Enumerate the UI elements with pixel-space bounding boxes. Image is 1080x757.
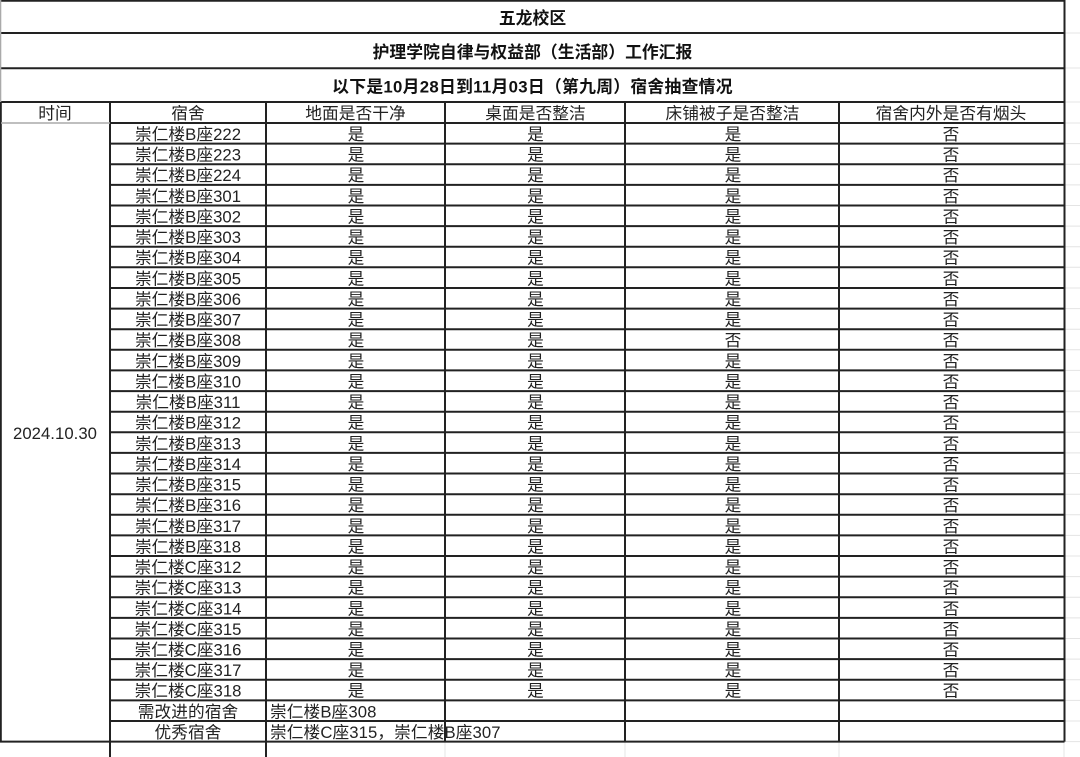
row: B301: 是 [725,187,742,206]
row: C312: 是 [348,558,365,577]
row: B316: 是 [348,496,365,515]
row: C315: 是 [725,620,742,639]
row: B223: 是 [348,146,365,165]
row: B224: 是 [348,166,365,185]
row: C314 [134,599,959,618]
row: B306: 是 [348,290,365,309]
row: B317: 崇仁楼B座317 [135,517,241,536]
row: B313 [135,434,959,453]
row: B316 [135,496,959,515]
row: C313: 是 [725,579,742,598]
row: B301: 崇仁楼B座301 [135,187,241,206]
row: C316: 崇仁楼C座316 [134,640,242,660]
row: B311: 是 [527,393,544,412]
row: B305: 是 [527,269,544,288]
row: B309: 否 [943,352,959,371]
row: B306: 是 [725,290,742,309]
row: B303: 是 [725,228,742,247]
row: B303: 崇仁楼B座303 [135,228,241,247]
row: B316: 否 [943,496,959,515]
row: B307: 是 [348,311,365,330]
row: B315: 否 [943,476,959,494]
heading: department report: 护理学院自律与权益部（生活部）工作汇报 [373,42,693,62]
row: B318: 是 [348,537,365,556]
row: C314: 否 [943,599,959,618]
row: B224: 是 [527,166,544,185]
row: B311: 是 [725,393,742,412]
row: C316: 是 [725,640,742,660]
row: B318: 是 [527,537,544,556]
row: C318: 是 [725,682,742,701]
row: B223: 否 [943,146,959,165]
row: C314: 崇仁楼C座314 [134,599,242,618]
row: B302: 是 [725,208,742,226]
row: B318: 是 [725,537,742,556]
row: B314: 是 [348,455,365,474]
row: C317: 是 [725,661,742,680]
table header row [38,104,1026,123]
row: B312 [135,414,959,433]
row: dorms needing improvement: 需改进的宿舍 [138,702,238,721]
row: dorms needing improvement [138,702,376,721]
row: B302 [135,208,959,226]
row: B313: 是 [527,434,544,453]
row: B306: 是 [527,290,544,309]
row: C313: 是 [348,579,365,598]
row: dorms needing improvement: 崇仁楼B座308 [270,702,376,721]
row: B317: 否 [943,517,959,536]
row: B306: 否 [943,290,959,309]
row: B224: 否 [943,166,959,185]
row: B311: 否 [943,393,959,412]
row: C315 [134,620,959,639]
row: B301: 否 [943,187,959,206]
table header row: 桌面是否整洁 [485,104,586,123]
row: B303: 是 [527,228,544,247]
row: B314: 崇仁楼B座314 [135,455,241,474]
row: B313: 是 [348,434,365,453]
row: B308: 崇仁楼B座308 [135,331,241,350]
row: B309 [135,352,959,371]
row: B315: 是 [348,476,365,494]
row: B315: 是 [725,476,742,494]
row: B222: 是 [527,125,544,144]
row: B302: 崇仁楼B座302 [135,208,241,226]
row: C312: 是 [527,558,544,577]
row: B307: 是 [725,311,742,330]
heading: inspection week: 以下是10月28日到11月03日（第九周）宿舍抽查情况 [332,76,733,96]
row: B317: 是 [348,517,365,536]
row: B310: 是 [348,372,365,391]
row: B307: 是 [527,311,544,330]
row: B315: 崇仁楼B座315 [135,476,241,494]
row: B310 [135,372,959,391]
row: B312: 是 [527,414,544,433]
table header row: 床铺被子是否整洁 [666,104,799,123]
table header row: 地面是否干净 [305,104,406,123]
row: C318 [134,682,959,701]
row: C318: 崇仁楼C座318 [134,682,242,701]
row: B307: 否 [943,311,959,330]
row: C313: 是 [527,579,544,598]
row: B314 [135,455,959,474]
row: B222 [135,125,959,144]
row: B311: 是 [348,393,365,412]
row: B224: 崇仁楼B座224 [135,166,241,185]
row: C315: 是 [348,620,365,639]
row: B309: 是 [527,352,544,371]
row: B223: 崇仁楼B座223 [135,146,241,165]
row: B311 [136,393,959,412]
row: C312: 是 [725,558,742,577]
row: B315 [135,476,959,494]
row: B315: 是 [527,476,544,494]
row: B304: 是 [348,249,365,268]
row: B305 [135,269,959,288]
row: C316: 是 [527,640,544,660]
row: B305: 是 [348,269,365,288]
row: C312 [134,558,959,577]
row: B310: 是 [725,372,742,391]
row: B314: 是 [725,455,742,474]
row: B314: 否 [943,455,959,474]
row: B224: 是 [725,166,742,185]
row: C314: 是 [348,599,365,618]
row: C317: 崇仁楼C座317 [134,661,242,680]
row: B222: 是 [725,125,742,144]
row: B224 [135,166,959,185]
title: campus name: 五龙校区 [499,8,566,28]
table header row: 宿舍 [171,104,205,123]
row: B312: 崇仁楼B座312 [135,414,241,433]
row: C317: 否 [943,661,959,680]
row: B223: 是 [725,146,742,165]
row: B312: 是 [348,414,365,433]
row: C312: 崇仁楼C座312 [134,558,242,577]
row: B314: 是 [527,455,544,474]
row: B303: 是 [348,228,365,247]
row: C313: 崇仁楼C座313 [134,579,242,598]
row: excellent dorms [155,723,501,742]
row: B318: 崇仁楼B座318 [135,537,241,556]
row: B222: 否 [943,125,959,144]
row: B301 [135,187,959,206]
row: B317: 是 [527,517,544,536]
row: B310: 否 [943,372,959,391]
row: B302: 否 [943,208,959,226]
row: B309: 是 [725,352,742,371]
row: B304 [135,249,959,268]
row: B307 [135,311,959,330]
row: B301: 是 [348,187,365,206]
row: C314: 是 [527,599,544,618]
row: B317: 是 [725,517,742,536]
row: B312: 否 [943,414,959,433]
table header row: 宿舍内外是否有烟头 [876,104,1026,123]
row: C315: 是 [527,620,544,639]
row: B308: 是 [348,331,365,350]
row: C318: 是 [348,682,365,701]
row: C313: 否 [943,579,959,598]
row: B304: 崇仁楼B座304 [135,249,241,268]
row: B305: 否 [943,269,959,288]
row: B312: 是 [725,414,742,433]
row: B309: 崇仁楼B座309 [135,352,241,371]
row: B303: 否 [943,228,959,247]
row: B318 [135,537,959,556]
row: C318: 否 [943,682,959,701]
row: B310: 崇仁楼B座310 [135,372,241,391]
row: B308: 是 [527,331,544,350]
row: C315: 崇仁楼C座315 [134,620,242,639]
row: B318: 否 [943,537,959,556]
row: B306: 崇仁楼B座306 [135,290,241,309]
row: C314: 是 [725,599,742,618]
row: B222: 崇仁楼B座222 [135,125,241,144]
inspection date cell: 2024.10.30 [13,424,97,443]
row: C316 [134,640,959,660]
row: B305: 是 [725,269,742,288]
row: B316: 是 [725,496,742,515]
row: B308: 否 [943,331,959,350]
row: C317: 是 [348,661,365,680]
row: B223: 是 [527,146,544,165]
row: B304: 否 [943,249,959,268]
row: B305: 崇仁楼B座305 [135,269,241,288]
row: B309: 是 [348,352,365,371]
row: B316: 是 [527,496,544,515]
row: B316: 崇仁楼B座316 [135,496,241,515]
row: B311: 崇仁楼B座311 [136,393,240,412]
row: C318: 是 [527,682,544,701]
row: B304: 是 [527,249,544,268]
row: B303 [135,228,959,247]
row: B313: 崇仁楼B座313 [135,434,241,453]
row: B317 [135,517,959,536]
row: B306 [135,290,959,309]
row: B308: 否 [725,331,741,350]
row: C316: 否 [943,640,959,660]
row: B301: 是 [527,187,544,206]
row: B302: 是 [527,208,544,226]
row: B302: 是 [348,208,365,226]
row: B313: 是 [725,434,742,453]
row: C316: 是 [348,640,365,660]
row: B223 [135,146,959,165]
row: C313 [134,579,959,598]
row: C312: 否 [943,558,959,577]
row: B310: 是 [527,372,544,391]
row: B308 [135,331,959,350]
table header row: 时间 [38,104,72,123]
row: excellent dorms: 优秀宿舍 [155,723,222,742]
row: excellent dorms: 崇仁楼C座315，崇仁楼B座307 [270,723,501,742]
row: B304: 是 [725,249,742,268]
row: B222: 是 [348,125,365,144]
row: B307: 崇仁楼B座307 [135,311,241,330]
row: B313: 否 [943,434,959,453]
row: C315: 否 [943,620,959,639]
row: C317: 是 [527,661,544,680]
row: C317 [134,661,959,680]
